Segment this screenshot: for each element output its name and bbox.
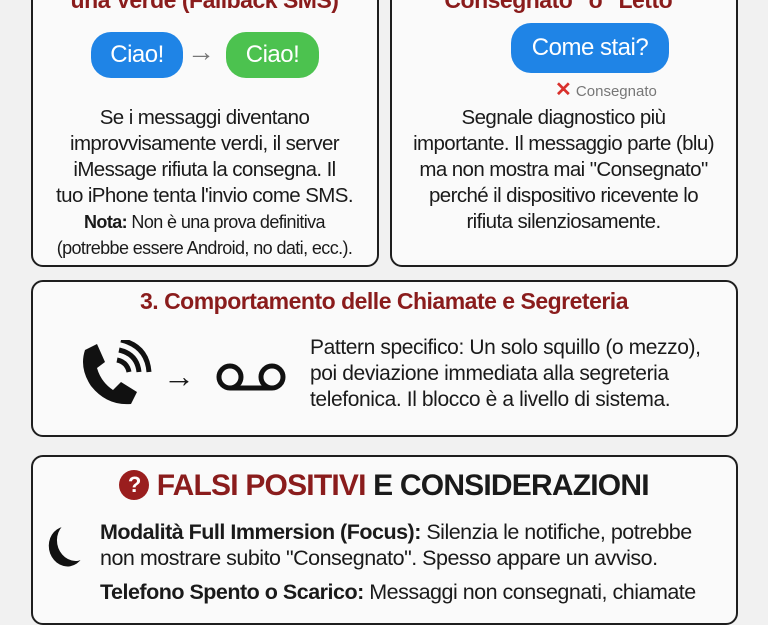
icon: green bubble xyxy=(226,32,319,78)
text block 1: (potrebbe essere Android, no dati, ecc.). xyxy=(57,238,352,258)
heading 3: 3. Comportamento delle Chiamate e Segreteria xyxy=(140,288,628,314)
icon: voicemail xyxy=(216,364,286,390)
heading 4: ? xyxy=(128,472,141,497)
text block 2: perché il dispositivo ricevente lo xyxy=(429,184,698,207)
item focus: non mostrare subito "Consegnato". Spesso appare un avviso. xyxy=(100,546,658,570)
delivered missing label: ✕ Consegnato xyxy=(555,79,657,101)
text block 2: ma non mostra mai "Consegnato" xyxy=(419,158,708,181)
text block 1: tuo iPhone tenta l'invio come SMS. xyxy=(56,184,353,207)
panel: green bubbles xyxy=(31,0,379,267)
text block 2 xyxy=(413,106,714,233)
panel: consegnato xyxy=(390,0,738,267)
arrow gray: → xyxy=(187,36,215,67)
icon: blue bubble xyxy=(91,32,183,78)
text block 1 xyxy=(56,106,353,258)
icon: blue bubble come stai xyxy=(511,23,669,73)
heading 4: FALSI POSITIVI E CONSIDERAZIONI xyxy=(157,469,649,502)
text block 3: Pattern specifico: Un solo squillo (o mezzo), xyxy=(310,336,701,359)
text block 3: telefonica. Il blocco è a livello di sistema. xyxy=(310,388,670,411)
icon: green bubble: Ciao! xyxy=(246,41,299,68)
item focus: Modalità Full Immersion (Focus): Silenzia le notifiche, potrebbe xyxy=(100,520,692,544)
text block 1: Nota: Non è una prova definitiva xyxy=(84,212,325,232)
icon: blue bubble come stai: Come stai? xyxy=(532,34,648,61)
text block 3 xyxy=(310,336,701,411)
text block 1: iMessage rifiuta la consegna. Il xyxy=(73,158,336,181)
text block 1: improvvisamente verdi, il server xyxy=(70,132,339,155)
item spento: Telefono Spento o Scarico: Messaggi non consegnati, chiamate xyxy=(100,580,696,604)
icon: moon xyxy=(54,518,96,564)
text block 3: poi deviazione immediata alla segreteria xyxy=(310,362,669,385)
text block 2: rifiuta silenziosamente. xyxy=(466,210,661,233)
icon: blue bubble: Ciao! xyxy=(110,41,164,68)
item focus xyxy=(100,520,692,570)
text block 1: Se i messaggi diventano xyxy=(100,106,309,129)
text block 2: Segnale diagnostico più xyxy=(462,106,665,129)
icon: phone ringing xyxy=(83,340,152,404)
panel: chiamate xyxy=(31,280,738,437)
text block 2: importante. Il messaggio parte (blu) xyxy=(413,132,714,155)
panel: falsi positivi xyxy=(31,455,738,625)
arrow: → xyxy=(163,358,195,394)
